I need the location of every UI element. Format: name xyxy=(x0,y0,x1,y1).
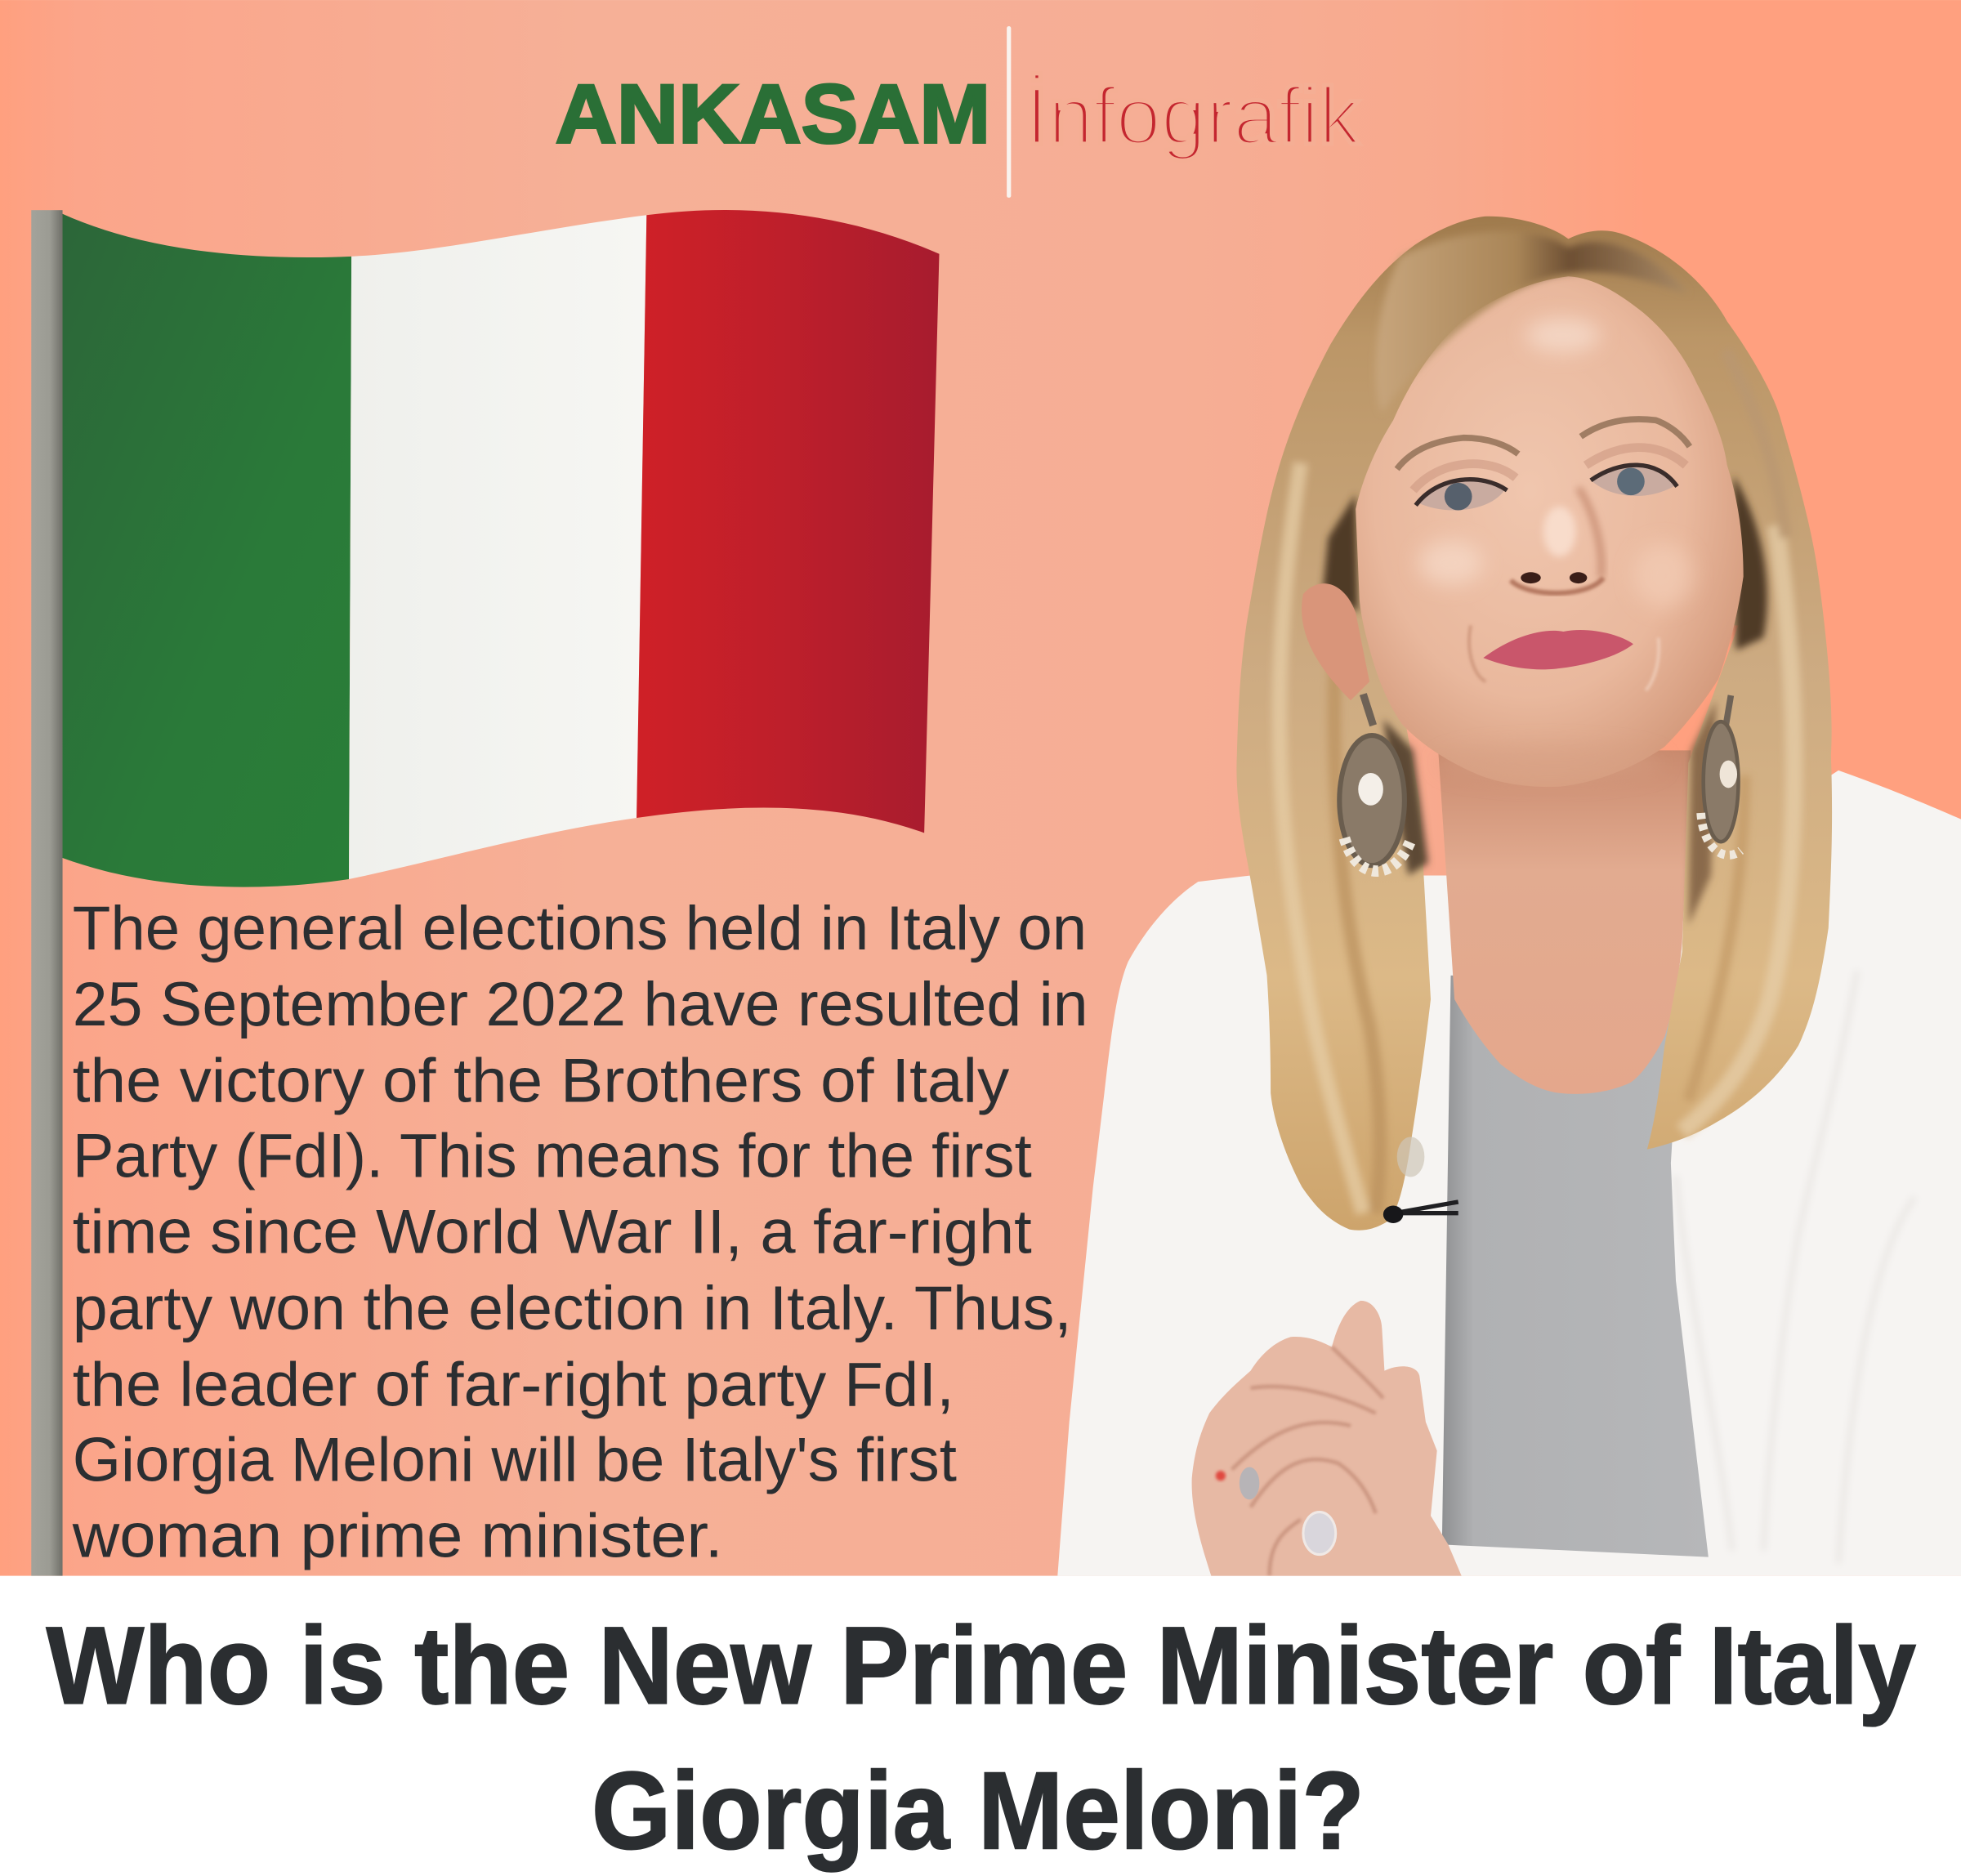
portrait: hair xyxy=(1236,217,1832,1231)
flag pole xyxy=(31,210,63,1576)
portrait: cheek shading xyxy=(1415,311,1695,608)
logo divider xyxy=(1007,26,1011,198)
portrait: microphone xyxy=(1383,1137,1458,1223)
portrait: right eye xyxy=(1586,448,1686,496)
flag white stripe xyxy=(349,215,646,879)
body paragraph: Party (FdI). This means for the first xyxy=(73,1121,1032,1190)
portrait: right eyebrow xyxy=(1581,419,1690,446)
portrait: ear xyxy=(1302,583,1369,700)
portrait: left eye xyxy=(1414,464,1516,511)
portrait: finger lines xyxy=(1232,1347,1383,1576)
portrait: face xyxy=(1356,276,1744,787)
body paragraph: 25 September 2022 have resulted in xyxy=(73,970,1088,1039)
portrait: right earring xyxy=(1701,695,1741,855)
portrait: shirt xyxy=(1442,976,1709,1557)
portrait: red mark on hand xyxy=(1216,1471,1226,1481)
logo: ANKASAM Infografik xyxy=(556,26,1360,198)
logo word: Infografik: İnfografik xyxy=(1025,71,1360,162)
body paragraph: The general elections held in Italy on xyxy=(73,894,1087,963)
portrait: nose xyxy=(1511,488,1603,593)
flag green stripe xyxy=(63,214,351,887)
body paragraph: woman prime minister. xyxy=(72,1502,723,1571)
body paragraph: the leader of far-right party FdI, xyxy=(73,1350,954,1419)
portrait: dark hair behind face xyxy=(1323,476,1767,926)
portrait: hands xyxy=(1192,1301,1466,1586)
portrait: lips xyxy=(1483,630,1633,669)
portrait: left earring xyxy=(1339,695,1411,871)
body paragraph: party won the election in Italy. Thus, xyxy=(73,1274,1072,1343)
flag red stripe xyxy=(637,210,939,833)
body paragraph: the victory of the Brothers of Italy xyxy=(73,1047,1010,1116)
logo wordmark: ANKASAM: ANKASAM xyxy=(556,67,990,161)
portrait: jacket shadows xyxy=(1676,971,1914,1563)
body paragraph: Giorgia Meloni will be Italy's first xyxy=(73,1425,957,1494)
title xyxy=(47,1604,1916,1872)
icon: Italian flag on pole xyxy=(31,210,939,1576)
body paragraph: time since World War II, a far-right xyxy=(73,1198,1032,1267)
portrait illustration: Giorgia Meloni xyxy=(1056,217,1961,1586)
title: Giorgia Meloni? xyxy=(592,1749,1365,1872)
portrait: left eyebrow xyxy=(1397,438,1518,469)
portrait: neck xyxy=(1438,750,1691,1094)
portrait: silver ring xyxy=(1240,1467,1259,1499)
body paragraph xyxy=(72,894,1088,1571)
portrait: jacket xyxy=(1056,770,1961,1586)
portrait: diamond ring xyxy=(1303,1512,1336,1555)
portrait: hair parting over forehead xyxy=(1376,232,1688,413)
portrait: hair strands xyxy=(1280,351,1794,1213)
portrait: smile creases xyxy=(1469,625,1659,690)
